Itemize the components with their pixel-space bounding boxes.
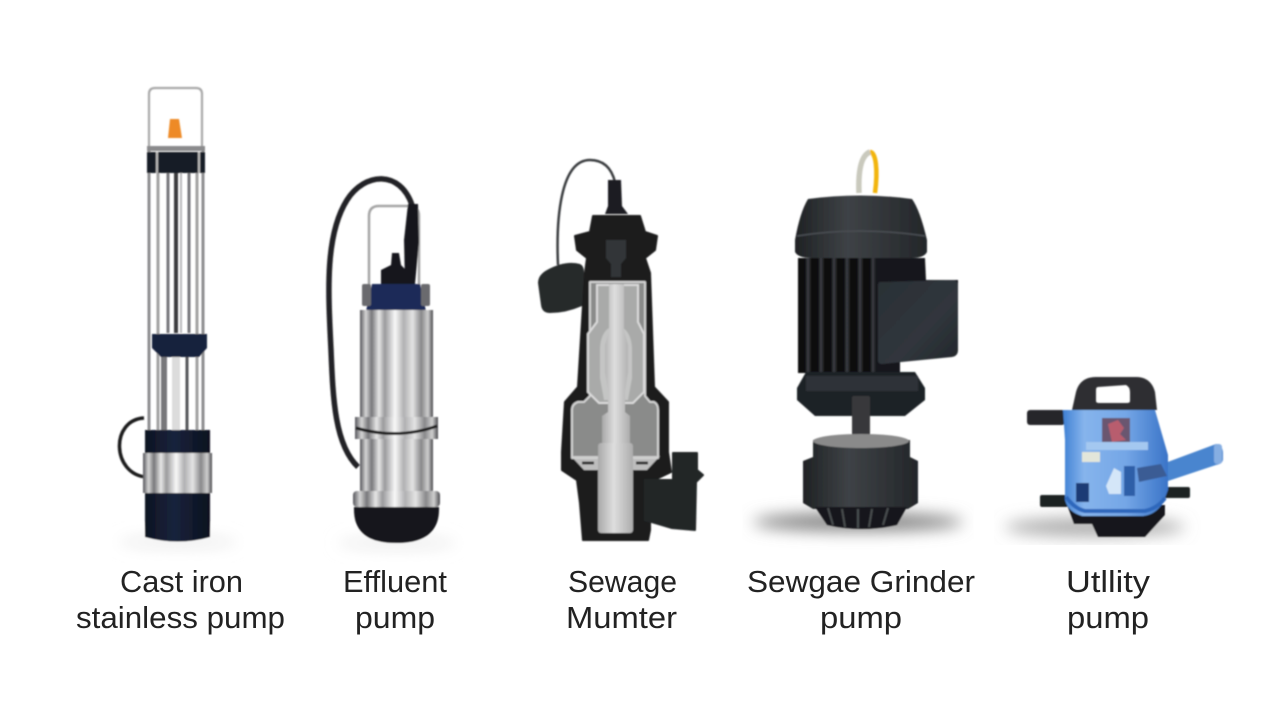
- lower steel body: [360, 439, 433, 492]
- black power cable: [329, 179, 412, 467]
- float switch: [538, 263, 588, 313]
- cable connector: [605, 180, 628, 214]
- bell housing: [600, 326, 632, 400]
- label: utility pump: pump: [1067, 600, 1149, 635]
- inner bearing chamber: [588, 285, 644, 403]
- power cable loop: [119, 418, 146, 477]
- black outer casing: [562, 216, 671, 540]
- label: effluent pump: Effluent: [343, 564, 447, 599]
- discharge outlet: [645, 453, 703, 530]
- drive shaft: [852, 396, 870, 440]
- floor shadow: [118, 537, 238, 547]
- terminal box: [878, 280, 958, 364]
- pump 1: cast iron stainless pump: [118, 88, 238, 547]
- grinder top face: [813, 434, 909, 448]
- upper seal detail: [606, 240, 626, 277]
- label: cast iron stainless pump: Cast iron: [120, 564, 243, 599]
- black base: [1067, 505, 1165, 537]
- navy base: [145, 493, 210, 542]
- lower blue rim: [1066, 497, 1165, 511]
- motor collar: [145, 430, 210, 453]
- label: sewage grinder pump: Sewgae Grinder: [747, 564, 975, 599]
- label: sewage pump: Mumter: [566, 600, 677, 635]
- label: effluent pump: pump: [355, 600, 435, 635]
- finned motor body: [798, 258, 878, 373]
- label: sewage grinder pump: pump: [820, 600, 902, 635]
- steel housing: [143, 453, 212, 493]
- clamp ring: [355, 417, 438, 439]
- label: effluent pump: [343, 564, 447, 635]
- label: cast iron stainless pump: [76, 564, 285, 635]
- seal details: [571, 456, 660, 470]
- grinder housing: [803, 440, 918, 509]
- bottom flange: [353, 491, 440, 507]
- carrying handle: [149, 88, 202, 150]
- lower shaft sleeve: [598, 443, 633, 533]
- internal red impeller: [1102, 418, 1130, 443]
- label: utility pump: [1066, 564, 1151, 635]
- blue motor cap: [366, 284, 426, 311]
- label: sewage pump: Sewage: [568, 564, 677, 599]
- feet: [1040, 495, 1068, 507]
- cutter impeller: [815, 507, 907, 529]
- cutaway section: [572, 282, 658, 458]
- float cable: [558, 160, 615, 265]
- motor backing: [876, 258, 958, 378]
- pump 5: utility pump: [1005, 377, 1223, 537]
- black base: [354, 507, 439, 543]
- pump 3: sewage pump cutaway: [538, 160, 703, 540]
- internal components: [1086, 442, 1148, 450]
- upper steel body: [360, 310, 433, 418]
- pump 4: sewage grinder pump: [753, 152, 963, 531]
- top clamp: [147, 152, 205, 173]
- central shaft: [602, 284, 630, 444]
- label: sewage grinder pump: [747, 564, 975, 635]
- carrying handle: [369, 206, 419, 285]
- middle clamp: [152, 334, 207, 357]
- black handle: [1072, 377, 1157, 410]
- floor shadow: [1005, 518, 1185, 536]
- pump 2: effluent pump: [329, 179, 457, 548]
- motor fan cover: [795, 196, 927, 258]
- orange cap: [168, 119, 182, 138]
- side inlet arm: [1027, 410, 1065, 425]
- label: utility pump: Utllity: [1066, 564, 1151, 599]
- outlet tube: [1165, 444, 1223, 482]
- floor shadow: [337, 538, 457, 548]
- motor flange: [797, 372, 925, 416]
- power cable: [870, 152, 876, 193]
- cable gland: [381, 204, 419, 284]
- label: cast iron stainless pump: stainless pump: [76, 600, 285, 635]
- floor shadow: [753, 513, 963, 531]
- transparent blue housing: [1063, 410, 1168, 516]
- tie rods: [149, 150, 203, 430]
- label: sewage pump: [566, 564, 677, 635]
